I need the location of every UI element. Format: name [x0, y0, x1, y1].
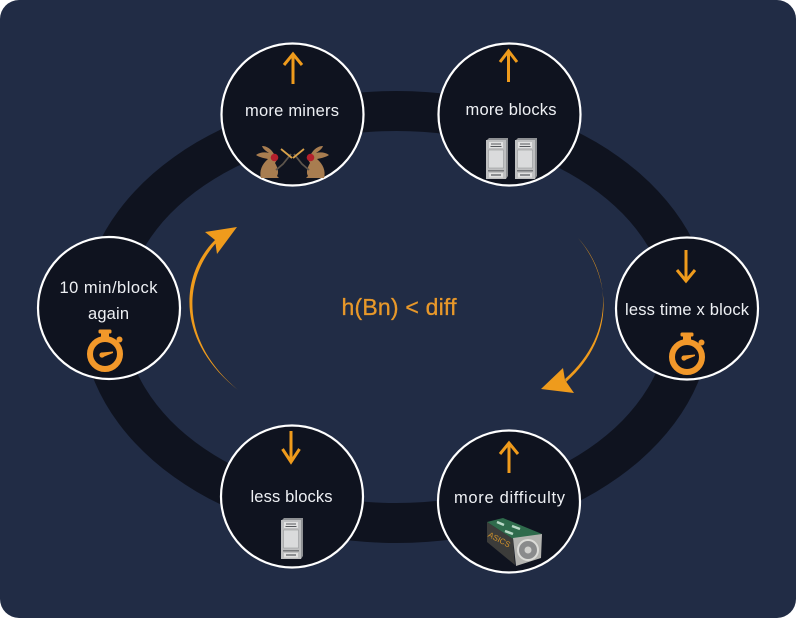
label: more blocks: [466, 101, 556, 119]
cycle ring: [82, 91, 712, 543]
icon: stopwatch: [90, 330, 122, 369]
node: more blocks: [438, 44, 580, 186]
label: less time x block: [625, 301, 750, 319]
icon: block server: [281, 518, 303, 559]
up arrow: [500, 443, 518, 473]
label: 10 min/block: [60, 279, 158, 297]
label: again: [88, 305, 129, 323]
down arrow: [282, 431, 300, 462]
node: 10 min/block again: [38, 237, 180, 379]
node: less blocks: [221, 426, 363, 568]
node: more difficulty: [438, 430, 580, 572]
node: more miners: [222, 44, 364, 186]
label: less blocks: [250, 488, 332, 506]
icon: stopwatch: [672, 332, 704, 372]
up arrow: [284, 54, 302, 84]
icon: ASIC miner: ASICS: [486, 530, 512, 549]
icon: ASIC miner: [486, 518, 542, 566]
down arrow: [677, 250, 695, 281]
label: more miners: [245, 102, 339, 120]
node: less time x block: [616, 238, 758, 380]
label: [60, 279, 158, 323]
label: more difficulty: [454, 489, 566, 507]
icon: fighting rabbits: [256, 146, 329, 178]
center formula: h(Bn) < diff: [342, 294, 457, 320]
arrow: clockwise left curve: [189, 227, 238, 390]
arrow: clockwise right curve: [541, 238, 604, 393]
up arrow: [500, 51, 517, 82]
icon: two block servers: [486, 138, 537, 179]
